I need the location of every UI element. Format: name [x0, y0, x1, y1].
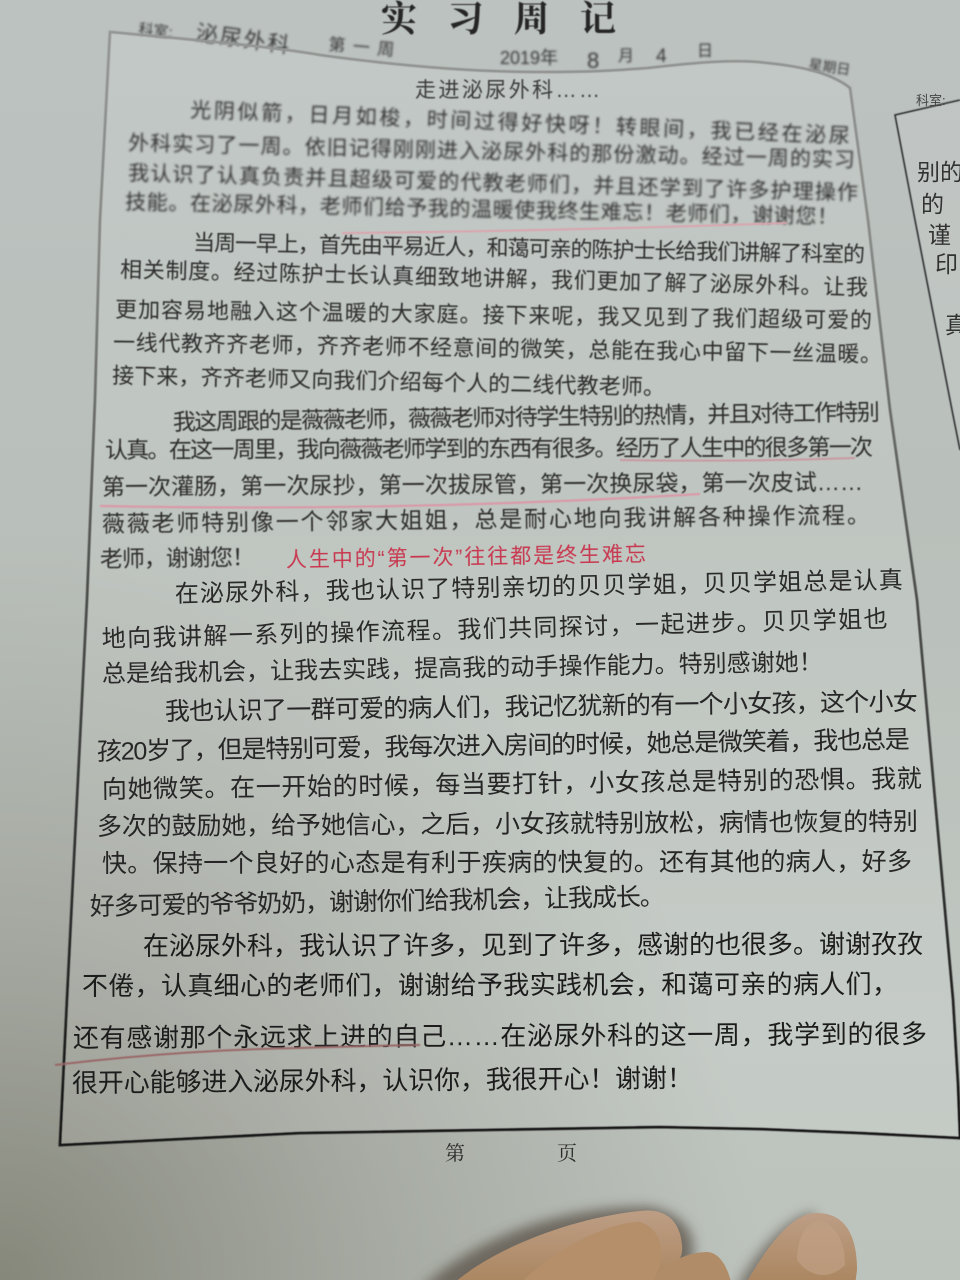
- text block: closing paragraph: 在泌尿外科，我认识了许多，见到了许多，感谢的也很多。谢谢孜孜: [143, 929, 923, 961]
- footer: page number label: [445, 1142, 577, 1165]
- heading: journal title: 实习周记: [381, 0, 616, 39]
- text block: paragraph 2: [112, 230, 882, 400]
- header fields: department, week and date: 第 一 周: [328, 35, 395, 60]
- text block: paragraph 3: 薇薇老师特别像一个邻家大姐姐，总是耐心地向我讲解各种操作流程。: [102, 502, 870, 537]
- header fields: department, week and date: 4: [656, 46, 667, 67]
- text block: paragraph 5: 我也认识了一群可爱的病人们，我记忆犹新的有一个小女孩，这个小女: [165, 688, 918, 726]
- panel: adjacent journal page on the right: [895, 93, 960, 450]
- panel: adjacent journal page on the right: 谨: [928, 222, 951, 248]
- text block: paragraph 4: 总是给我机会，让我去实践，提高我的动手操作能力。特别感谢她！: [102, 649, 823, 688]
- text block: paragraph 1: 光阴似箭，日月如梭，时间过得好快呀！转眼间，我已经在泌尿: [190, 99, 850, 148]
- text block: closing paragraph: 不倦，认真细心的老师们，谢谢给予我实践机会，和蔼可亲的病人们，: [82, 969, 898, 1001]
- text block: paragraph 1: 我认识了认真负责并且超级可爱的代教老师们，并且还学到了许多护理操作: [128, 162, 858, 205]
- text block: paragraph 2: 接下来，齐齐老师又向我们介绍每个人的二线代教老师。: [112, 363, 665, 400]
- text block: paragraph 5: 好多可爱的爷爷奶奶，谢谢你们给我机会，让我成长。: [90, 883, 665, 921]
- text block: paragraph 1: 技能。在泌尿外科，老师们给予我的温暖使我终生难忘！老师们，谢谢您！: [125, 191, 838, 229]
- text block: paragraph 3: 我这周跟的是薇薇老师，薇薇老师对待学生特别的热情，并且对待工作特别: [173, 399, 880, 435]
- text block: closing paragraph: 很开心能够进入泌尿外科，认识你，我很开心！谢谢！: [72, 1063, 693, 1098]
- text block: paragraph 5: [90, 688, 922, 921]
- header fields: department, week and date: 日: [697, 43, 713, 60]
- text block: paragraph 1: [125, 99, 858, 229]
- text block: paragraph 2: 一线代教齐齐老师，齐齐老师不经意间的微笑，总能在我心中留下一丝温暖。: [113, 330, 882, 367]
- header fields: department, week and date: 月: [618, 48, 634, 65]
- text block: paragraph 4: 地向我讲解一系列的操作流程。我们共同探讨，一起进步。贝贝学姐也: [101, 606, 888, 653]
- text block: paragraph 3: [100, 399, 880, 572]
- annotations: red underlines: [55, 223, 855, 1065]
- footer: page number label: 第: [445, 1142, 465, 1165]
- text block: paragraph 5: 多次的鼓励她，给予她信心，之后，小女孩就特别放松，病情也恢复的特别: [97, 808, 918, 841]
- header fields: department, week and date: 星期日: [808, 56, 851, 78]
- text block: paragraph 3: 认真。在这一周里，我向薇薇老师学到的东西有很多。经历了人生中的很多第一次: [105, 434, 873, 463]
- text block: closing paragraph: [72, 929, 927, 1098]
- panel: adjacent journal page on the right: 的: [921, 191, 944, 217]
- header fields: department, week and date: 科室:: [138, 21, 173, 42]
- text block: paragraph 4: [101, 567, 903, 688]
- header fields: department, week and date: 泌尿外科: [194, 20, 291, 58]
- text block: paragraph 5: 向她微笑。在一开始的时候，每当要打针，小女孩总是特别的恐惧。我就: [102, 765, 922, 804]
- panel: adjacent journal page on the right: 印: [935, 251, 958, 277]
- text block: paragraph 2: 当周一早上，首先由平易近人，和蔼可亲的陈护士长给我们讲解了科室的: [193, 230, 865, 267]
- title: handwritten heading: 走进泌尿外科……: [415, 79, 600, 102]
- text block: paragraph 2: 更加容易地融入这个温暖的大家庭。接下来呢，我又见到了我们超级可爱的: [115, 297, 872, 333]
- text block: paragraph 1: 外科实习了一周。依旧记得刚刚进入泌尿外科的那份激动。经过一周的实习: [128, 132, 855, 172]
- text block: paragraph 5: 孩20岁了，但是特别可爱，我每次进入房间的时候，她总是微笑着，我也总是: [97, 726, 910, 766]
- header fields: department, week and date: 2019年: [500, 48, 558, 68]
- callout: red teacher comment: 人生中的“第一次”往往都是终生难忘: [286, 543, 646, 572]
- text block: paragraph 5: 快。保持一个良好的心态是有利于疾病的快复的。还有其他的病人，好多: [102, 848, 912, 878]
- panel: adjacent journal page on the right: 科室:: [916, 93, 946, 108]
- header fields: department, week and date: [138, 20, 851, 78]
- text block: paragraph 2: 相关制度。经过陈护士长认真细致地讲解，我们更加了解了泌尿外科。让我: [120, 257, 868, 300]
- text block: paragraph 3: 第一次灌肠，第一次尿抄，第一次拔尿管，第一次换尿袋，第一次皮试……: [102, 469, 863, 500]
- text block: closing paragraph: 还有感谢那个永远求上进的自己……在泌尿外科的这一周，我学到的很多: [73, 1019, 927, 1053]
- footer: page number label: 页: [557, 1142, 577, 1165]
- header fields: department, week and date: 8: [587, 48, 599, 73]
- hand: fingers holding the page: [420, 1207, 857, 1280]
- text block: paragraph 4: 在泌尿外科，我也认识了特别亲切的贝贝学姐，贝贝学姐总是认真: [175, 567, 903, 608]
- text block: paragraph 3: 老师，谢谢您！: [100, 544, 255, 572]
